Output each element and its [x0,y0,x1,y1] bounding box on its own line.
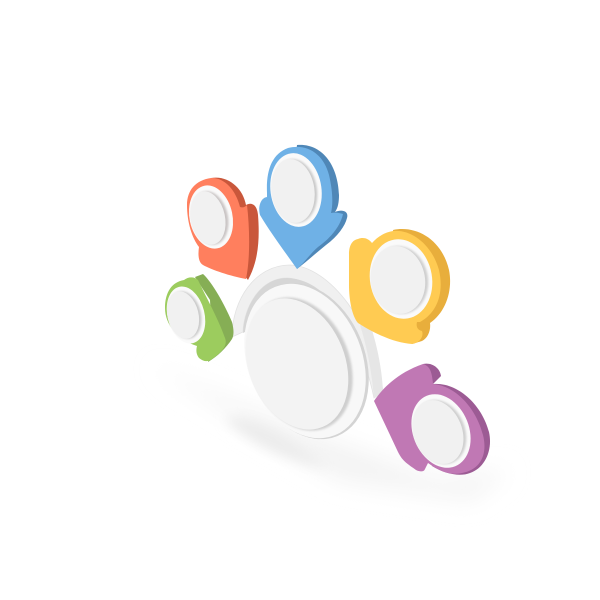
pin: green [161,274,234,362]
disc face [228,281,372,447]
pin: orange [183,178,259,280]
floor shadows [150,365,510,500]
main white disc [222,264,391,458]
arc band behind main disc [232,265,383,398]
disc rim [223,264,391,458]
pin: yellow [349,229,450,344]
pin: blue [259,145,347,269]
pin: purple [374,364,490,477]
